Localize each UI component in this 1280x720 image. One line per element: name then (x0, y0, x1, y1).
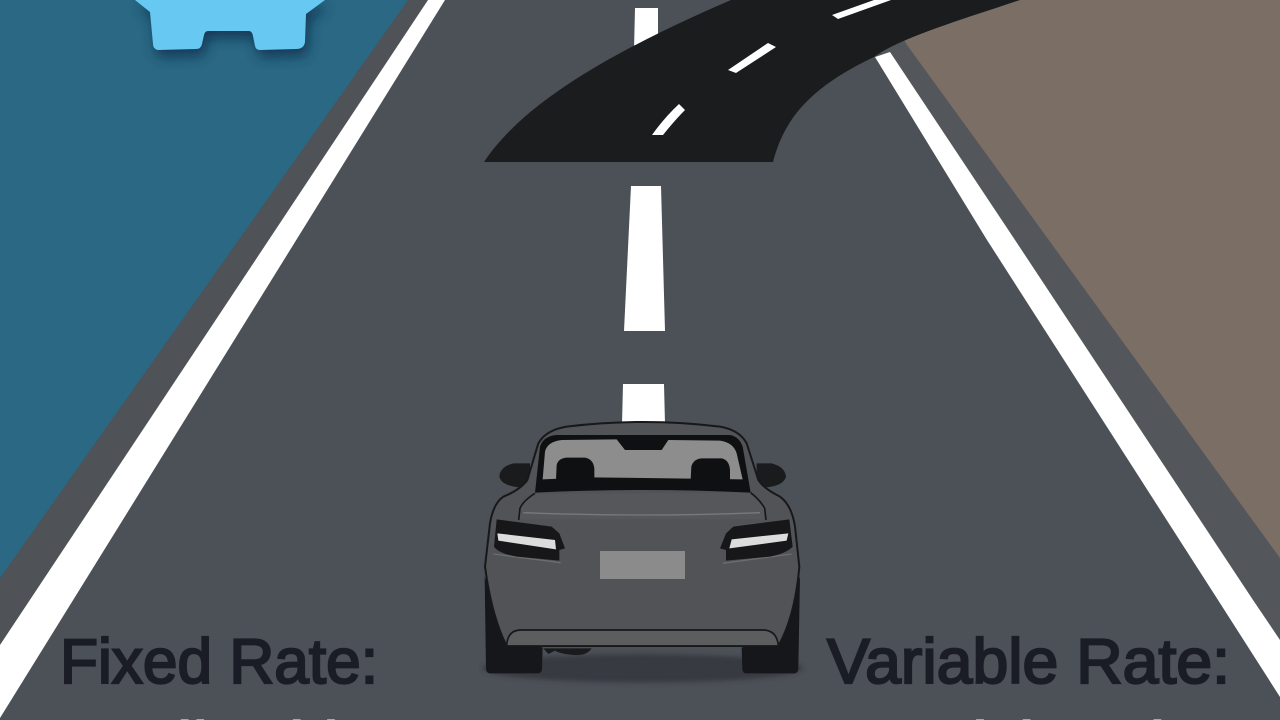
heading: variable rate: Variable Rate: (827, 627, 1230, 697)
rear wheels (485, 577, 800, 673)
rear window (543, 439, 743, 479)
left white edge line (0, 0, 445, 718)
branch road lane dashes (652, 0, 891, 135)
right tail light (720, 519, 793, 561)
license plate (600, 551, 685, 579)
center lane dashes (622, 8, 665, 424)
trunk crease (523, 513, 760, 515)
rear bumper (507, 630, 778, 646)
side mirrors (499, 463, 786, 487)
curved black road branching off (484, 0, 1020, 162)
heading: fixed rate: Fixed Rate: (60, 627, 378, 697)
right road shoulder (860, 0, 1280, 668)
land panel: right (880, 0, 1280, 558)
trunk lid (520, 493, 765, 519)
trunk outline (519, 493, 766, 520)
right white edge line (875, 52, 1280, 697)
exhaust (543, 648, 592, 655)
water panel: left (0, 0, 408, 578)
car body (485, 422, 799, 646)
car ground shadow (483, 654, 803, 682)
car seen from behind (483, 422, 803, 682)
headrests (556, 458, 730, 482)
icon: piggy bank (135, 0, 328, 57)
left tail light (493, 519, 792, 563)
cabin glass surround (535, 435, 751, 493)
left road shoulder (0, 0, 440, 680)
